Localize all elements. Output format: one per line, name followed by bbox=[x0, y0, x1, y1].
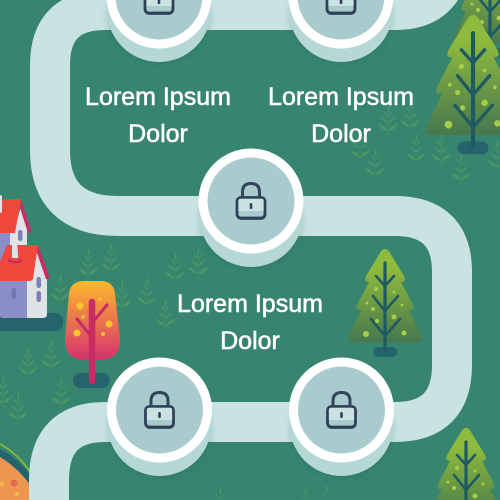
tree: bottom-right pine bbox=[436, 428, 496, 500]
grass sprigs bbox=[0, 100, 500, 500]
label: top left: Dolor bbox=[128, 120, 188, 148]
hill: bottom-left orange bbox=[0, 444, 31, 500]
label: top right: Lorem Ipsum bbox=[268, 83, 414, 111]
houses bbox=[0, 195, 63, 331]
label: top right: Dolor bbox=[311, 120, 371, 148]
node: center bbox=[198, 148, 304, 267]
tree: middle pine bbox=[348, 249, 422, 357]
node: top left bbox=[106, 0, 212, 62]
label: center: Lorem Ipsum bbox=[177, 290, 323, 318]
node: top right bbox=[288, 0, 394, 62]
node: bottom left bbox=[107, 358, 212, 476]
tree: orange bbox=[65, 281, 120, 388]
label: top left: Lorem Ipsum bbox=[85, 83, 231, 111]
label: center: Dolor bbox=[220, 327, 280, 355]
node: bottom right bbox=[289, 358, 394, 476]
tree: large pine bbox=[425, 15, 500, 154]
tree: top-right small pine bbox=[453, 0, 500, 58]
